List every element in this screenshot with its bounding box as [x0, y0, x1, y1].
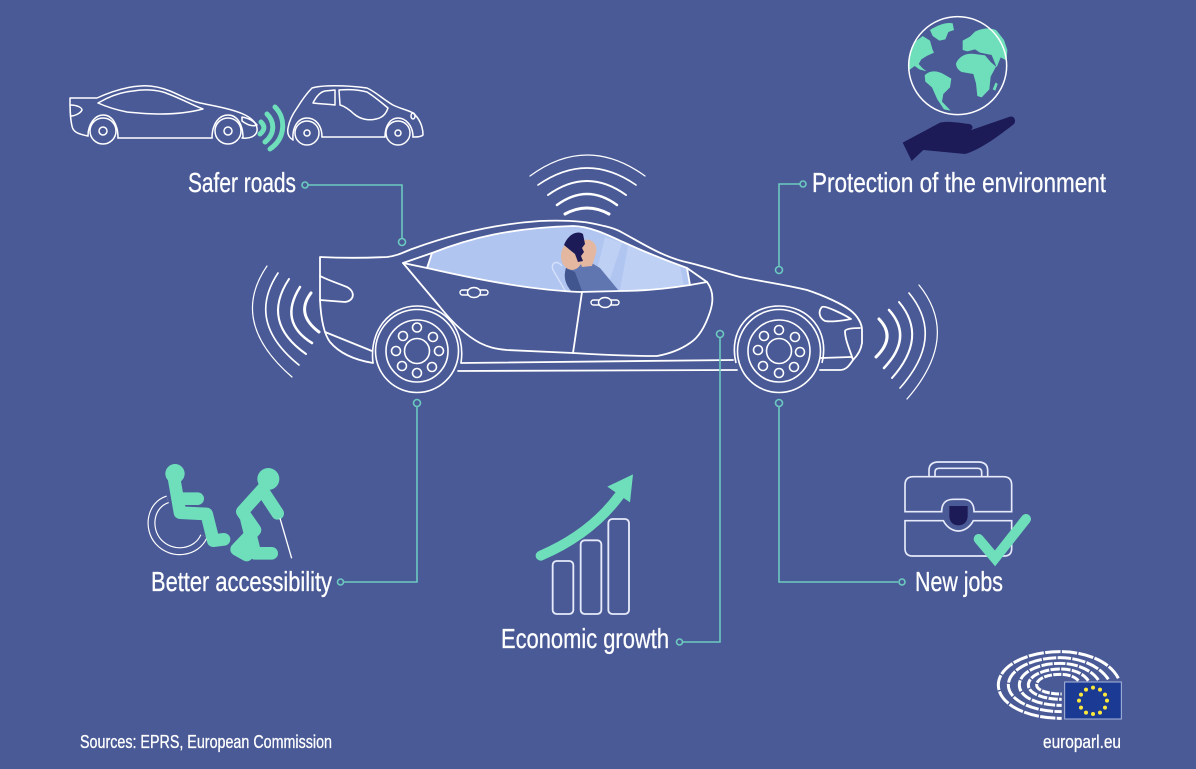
icon: rising bar chart	[541, 474, 633, 614]
icon: wheelchair user and person with cane	[151, 464, 292, 558]
bars	[553, 519, 629, 614]
globe	[909, 17, 1007, 115]
hemicycle	[998, 652, 1118, 718]
rear wheel	[373, 306, 462, 392]
car outline	[320, 221, 862, 371]
icon: rear sensor waves	[252, 266, 319, 377]
heading: New jobs: New jobs	[915, 566, 1003, 597]
connector: Safer roads	[302, 182, 406, 246]
clasp	[949, 506, 968, 525]
connector: Economic growth	[676, 330, 724, 645]
heading: Protection of the environment: Protection of the environment	[812, 167, 1106, 198]
driver	[552, 232, 619, 292]
window glass	[427, 226, 690, 292]
source note: Sources: EPRS, European Commission	[80, 731, 332, 752]
left small car	[70, 86, 257, 144]
heading: Economic growth: Economic growth	[501, 623, 669, 654]
EU flag	[1065, 682, 1121, 719]
icon: briefcase with check mark	[905, 462, 1026, 558]
sills	[461, 360, 733, 363]
cane	[280, 518, 292, 558]
headlamp	[820, 307, 851, 321]
door handles	[460, 288, 619, 308]
walking figure	[237, 468, 279, 555]
connector: Protection of the environment	[776, 181, 806, 274]
logo: European Parliament hemicycle and EU flag	[998, 652, 1121, 719]
icon: wireless signal above car	[530, 155, 645, 214]
growth arrow	[541, 474, 633, 556]
heading: Safer roads: Safer roads	[188, 167, 296, 198]
wheelchair figure	[165, 464, 224, 541]
check mark	[979, 519, 1026, 558]
right small car	[288, 86, 423, 145]
windscreen reflections	[592, 237, 684, 291]
icon: teal signal waves	[260, 107, 283, 149]
hand	[903, 116, 1015, 161]
icon: globe in hand	[903, 17, 1015, 161]
tail lamp	[320, 276, 353, 302]
website label: europarl.eu	[1043, 731, 1121, 752]
connector: New jobs	[776, 400, 905, 585]
main car illustration	[320, 221, 862, 392]
connector: Better accessibility	[338, 400, 420, 585]
front wheel	[734, 306, 824, 392]
icon: two cars communicating	[70, 86, 423, 149]
heading: Better accessibility: Better accessibility	[151, 566, 332, 597]
briefcase	[905, 462, 1012, 556]
wheelchair ring	[151, 499, 204, 551]
icon: front sensor waves	[876, 285, 937, 399]
